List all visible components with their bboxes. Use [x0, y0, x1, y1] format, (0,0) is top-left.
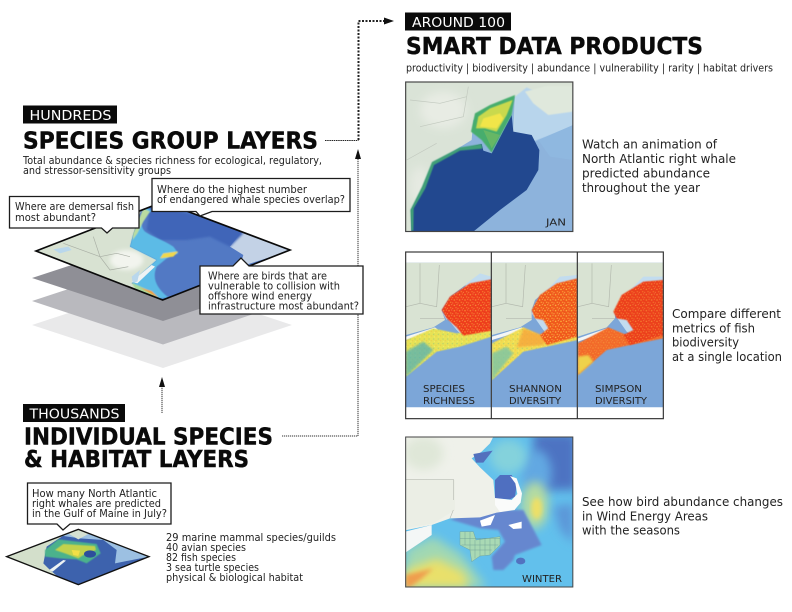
text: species list: 40 avian species [166, 542, 246, 554]
label: simpson diversity: SIMPSON [595, 384, 642, 395]
map: bird abundance winter [403, 433, 577, 587]
tag: hundreds: HUNDREDS [30, 109, 112, 124]
heading: species group layers: SPECIES GROUP LAYERS [23, 128, 318, 154]
callout: endangered whale species [152, 178, 350, 216]
text: species list [166, 532, 336, 584]
heading: individual species and habitat layers: INDIVIDUAL SPECIES [24, 424, 273, 450]
text: bird abundance description [582, 495, 783, 538]
map: species richness [406, 263, 491, 407]
label: simpson diversity: DIVERSITY [595, 396, 647, 407]
tag: thousands [23, 404, 125, 422]
arrow: individual layers to smart data products [282, 149, 361, 436]
layer stack: gray layers [32, 235, 292, 368]
tag: around 100 [405, 12, 511, 31]
map: individual species diamond [5, 528, 152, 587]
callout: vulnerable birds [200, 258, 363, 314]
heading: individual species and habitat layers: & HABITAT LAYERS [24, 447, 249, 473]
label: shannon diversity [509, 384, 562, 407]
callout: vulnerable birds: vulnerable to collision with [208, 280, 340, 292]
text: right whale description: North Atlantic right whale [582, 152, 736, 166]
text: bird abundance description: with the seasons [582, 524, 680, 538]
text: species list: 82 fish species [166, 552, 236, 564]
text: species list: physical & biological habitat [166, 572, 303, 584]
text: species list: 29 marine mammal species/guilds [166, 532, 336, 544]
text: bird abundance description: in Wind Energy Areas [582, 510, 708, 524]
label: shannon diversity: DIVERSITY [509, 396, 561, 407]
callout: right whales in Gulf of Maine: right whales are predicted [32, 499, 161, 510]
text: biodiversity description: Compare different [672, 307, 781, 321]
label: WINTER: WINTER [522, 574, 562, 585]
tag: around 100: AROUND 100 [412, 16, 505, 31]
arrow: individual layers to species group layers [159, 377, 165, 413]
text: right whale description: Watch an animation of [582, 138, 718, 152]
text: right whale description: throughout the year [582, 181, 700, 195]
text: right whale description: predicted abundance [582, 166, 710, 180]
map: right whale abundance [405, 82, 573, 232]
text: bird abundance description: See how bird abundance changes [582, 495, 783, 509]
text: species group description [22, 155, 322, 177]
callout: vulnerable birds: infrastructure most abundant? [208, 300, 359, 312]
callout: vulnerable birds: offshore wind energy [208, 290, 312, 302]
panel: fish biodiversity maps [405, 252, 664, 419]
arrow: species group layers to smart data products [325, 18, 394, 140]
label: species richness: RICHNESS [423, 396, 475, 407]
heading: individual species and habitat layers [24, 424, 273, 473]
callout: vulnerable birds: Where are birds that are [208, 270, 327, 282]
map: simpson diversity [578, 263, 663, 407]
text: product categories: productivity | biodiversity | abundance | vulnerability | rarity | habitat drivers [406, 64, 773, 74]
label: JAN: JAN [545, 218, 566, 228]
callout: endangered whale species: of endangered whale species overlap? [157, 194, 345, 206]
callout: right whales in Gulf of Maine: in the Gulf of Maine in July? [32, 509, 167, 520]
text: species group description: and stressor-sensitivity groups [23, 165, 171, 177]
callout: right whales in Gulf of Maine: How many North Atlantic [32, 489, 157, 500]
text: biodiversity description: biodiversity [672, 336, 739, 350]
callout: demersal fish: most abundant? [15, 212, 96, 224]
label: shannon diversity: SHANNON [509, 384, 562, 395]
callout: endangered whale species: Where do the highest number [157, 184, 308, 196]
label: species richness: SPECIES [423, 384, 465, 395]
text: biodiversity description: at a single location [672, 350, 782, 364]
label: simpson diversity [595, 384, 647, 407]
callout: demersal fish [10, 196, 139, 233]
label: species richness [423, 384, 475, 407]
text: species list: 3 sea turtle species [166, 562, 259, 574]
text: biodiversity description: metrics of fish [672, 322, 755, 336]
callout: right whales in Gulf of Maine [28, 483, 171, 530]
tag: hundreds [23, 106, 117, 124]
heading: smart data products: SMART DATA PRODUCTS [406, 34, 703, 60]
text: species group description: Total abundance & species richness for ecological, regulatory, [22, 155, 322, 167]
text: biodiversity description [672, 307, 782, 364]
text: right whale description [582, 138, 736, 195]
map: shannon diversity [492, 263, 577, 407]
tag: thousands: THOUSANDS [28, 408, 119, 422]
callout: demersal fish: Where are demersal fish [15, 201, 134, 213]
map: species group layer diamond [33, 200, 293, 303]
